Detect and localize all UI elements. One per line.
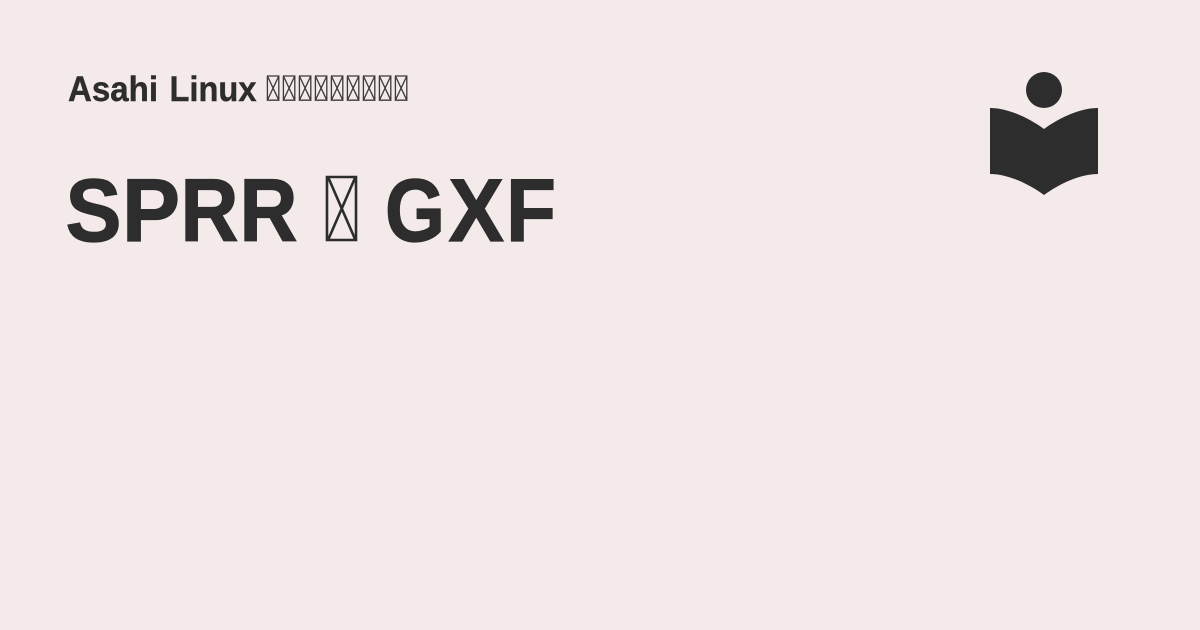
icon: reader with open book <box>990 72 1098 195</box>
main title: G <box>385 160 445 260</box>
site heading: Asahi <box>68 70 158 109</box>
main title: R <box>240 160 298 260</box>
main title: S <box>66 160 122 260</box>
main title <box>66 160 556 260</box>
main title: X <box>448 160 504 260</box>
main title: R <box>180 160 238 260</box>
main title: F <box>506 160 556 260</box>
site heading: Linux <box>170 70 257 109</box>
main title: P <box>122 160 180 260</box>
site heading <box>68 70 407 109</box>
